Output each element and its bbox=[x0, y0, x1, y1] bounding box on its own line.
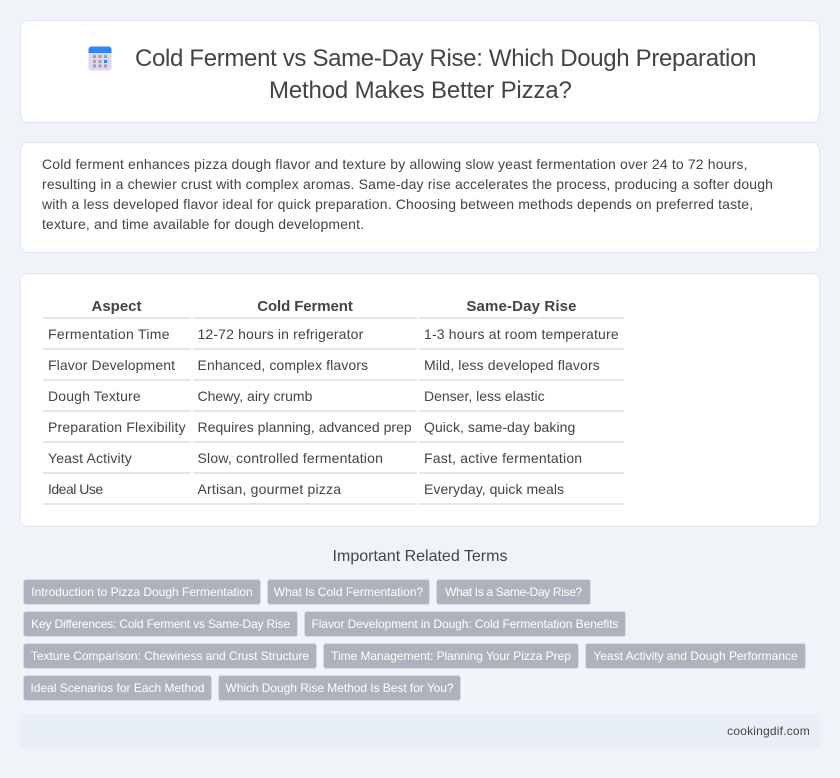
tag bbox=[23, 643, 317, 669]
tag bbox=[23, 611, 298, 637]
tag: Which Dough Rise Method Is Best for You? bbox=[225, 681, 454, 695]
summary text bbox=[42, 156, 773, 232]
tag bbox=[304, 611, 626, 637]
row: preparation flexibility: Preparation Flexibility bbox=[48, 419, 186, 435]
tag: What Is Cold Fermentation? bbox=[274, 585, 423, 599]
row: preparation flexibility bbox=[48, 419, 575, 435]
row: ideal use: Artisan, gourmet pizza bbox=[198, 481, 341, 497]
tag bbox=[218, 675, 461, 701]
heading: related terms: Important Related Terms bbox=[333, 548, 507, 565]
row: ideal use: Ideal Use bbox=[48, 481, 103, 497]
tag: Texture Comparison: Chewiness and Crust Structure bbox=[31, 649, 309, 663]
row: flavor development bbox=[48, 357, 600, 373]
tag bbox=[436, 579, 591, 605]
row: fermentation time: 1-3 hours at room temperature bbox=[424, 326, 619, 342]
row: fermentation time: Fermentation Time bbox=[48, 326, 170, 342]
title: Method Makes Better Pizza? bbox=[269, 77, 572, 104]
panel: summary bbox=[20, 142, 820, 253]
title bbox=[135, 45, 756, 104]
tag: Flavor Development in Dough: Cold Fermentation Benefits bbox=[312, 617, 618, 631]
row: ideal use: Everyday, quick meals bbox=[424, 481, 564, 497]
summary text: resulting in a chewier crust with complex aromas. Same-day rise accelerates the process, producing a softer dough bbox=[42, 176, 773, 192]
row: flavor development: Flavor Development bbox=[48, 357, 175, 373]
title: Cold Ferment vs Same-Day Rise: Which Dough Preparation bbox=[135, 45, 756, 72]
panel: comparison table bbox=[20, 273, 820, 527]
footer bar bbox=[20, 714, 820, 748]
tag: Key Differences: Cold Ferment vs Same-Day Rise bbox=[31, 617, 290, 631]
tag bbox=[23, 579, 261, 605]
tag bbox=[23, 675, 212, 701]
tag bbox=[267, 579, 430, 605]
row: yeast activity bbox=[48, 450, 582, 466]
row: fermentation time bbox=[48, 326, 619, 342]
panel: header bbox=[20, 20, 820, 123]
row: dough texture: Dough Texture bbox=[48, 388, 141, 404]
tag: Introduction to Pizza Dough Fermentation bbox=[31, 585, 253, 599]
icon: calendar bbox=[88, 46, 112, 70]
row: flavor development: Mild, less developed flavors bbox=[424, 357, 600, 373]
row: yeast activity: Fast, active fermentation bbox=[424, 450, 582, 466]
comparison table bbox=[43, 298, 624, 505]
summary text: texture, and time available for dough development. bbox=[42, 216, 364, 232]
row: ideal use bbox=[48, 481, 564, 497]
row: dough texture bbox=[48, 388, 545, 404]
related term tags bbox=[23, 579, 806, 701]
row: preparation flexibility: Requires planning, advanced prep bbox=[198, 419, 412, 435]
row: yeast activity: Slow, controlled fermentation bbox=[198, 450, 383, 466]
tag: Yeast Activity and Dough Performance bbox=[593, 649, 798, 663]
row: flavor development: Enhanced, complex flavors bbox=[198, 357, 368, 373]
footer credit: cookingdif.com bbox=[727, 724, 810, 738]
row: dough texture: Chewy, airy crumb bbox=[198, 388, 312, 404]
tag bbox=[585, 643, 806, 669]
table header: cold ferment: Cold Ferment bbox=[257, 298, 353, 315]
row: dough texture: Denser, less elastic bbox=[424, 388, 545, 404]
tag: Ideal Scenarios for Each Method bbox=[30, 681, 205, 695]
tag bbox=[323, 643, 579, 669]
row: preparation flexibility: Quick, same-day baking bbox=[424, 419, 575, 435]
tag: What Is a Same-Day Rise? bbox=[445, 585, 582, 599]
table header: same-day rise: Same-Day Rise bbox=[466, 298, 577, 315]
summary text: with a less developed flavor ideal for quick preparation. Choosing between methods depends on preferred taste, bbox=[42, 196, 753, 212]
tag: Time Management: Planning Your Pizza Prep bbox=[331, 649, 571, 663]
table header: aspect: Aspect bbox=[91, 298, 142, 315]
row: fermentation time: 12-72 hours in refrigerator bbox=[198, 326, 363, 342]
row: yeast activity: Yeast Activity bbox=[48, 450, 132, 466]
summary text: Cold ferment enhances pizza dough flavor and texture by allowing slow yeast fermentation over 24 to 72 hours, bbox=[42, 156, 748, 172]
